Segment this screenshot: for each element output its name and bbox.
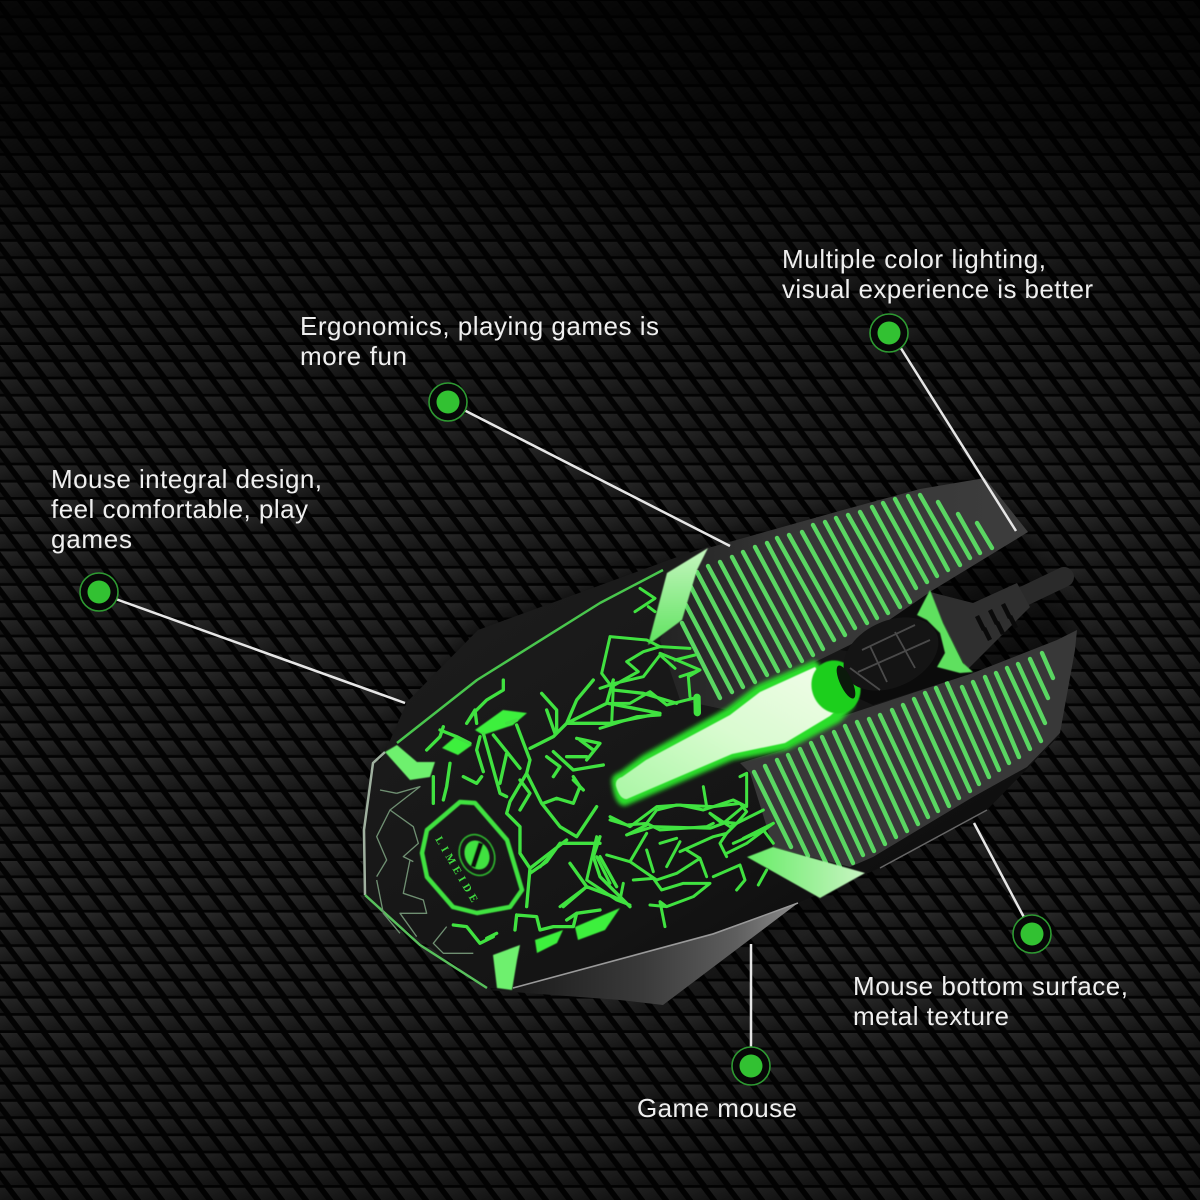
lower green trim <box>747 847 865 898</box>
shell edge highlights <box>364 570 987 988</box>
callout text: visual experience is better <box>782 274 1093 304</box>
scroll wheel housing glow <box>803 652 869 722</box>
callout text: Mouse integral design, <box>51 464 322 494</box>
scroll wheel <box>832 603 950 705</box>
left green trim <box>385 745 435 780</box>
game mouse illustration <box>362 478 1077 1005</box>
callout line <box>750 944 752 1054</box>
bright green diamonds <box>442 710 620 953</box>
callout line <box>897 342 1016 531</box>
top button <box>660 478 1028 710</box>
callout dot <box>429 383 467 421</box>
callout: multiple colour lighting <box>782 244 1093 531</box>
mouse body shell <box>362 546 1060 1005</box>
brand name on shield: LIMEIDE <box>432 834 480 905</box>
mouse drop shadow <box>363 478 1077 1005</box>
callout text: more fun <box>300 341 407 371</box>
green lightning cracks: upper centre <box>600 588 773 838</box>
callout dot <box>80 573 118 611</box>
top button light stripes <box>682 495 992 698</box>
callout: bottom surface <box>853 823 1128 1031</box>
cable and strain relief <box>930 577 1064 670</box>
shield emblem <box>422 802 522 913</box>
callout dot <box>1013 915 1051 953</box>
callout: game mouse <box>637 944 797 1123</box>
bottom button light stripes <box>754 653 1053 867</box>
callout text: games <box>51 524 132 554</box>
callout text: Mouse bottom surface, <box>853 971 1128 1001</box>
callout line <box>974 823 1027 923</box>
callout: mouse integral design <box>51 464 405 703</box>
green lightning cracks: lower centre <box>560 803 773 927</box>
green lightning cracks: left <box>427 680 677 943</box>
lower metal wedge <box>487 903 798 1005</box>
callout dot <box>870 314 908 352</box>
callout: ergonomics <box>300 311 730 546</box>
callout line <box>110 597 405 703</box>
callout text: metal texture <box>853 1001 1009 1031</box>
faint cracks on mouse nose <box>377 787 473 953</box>
callout text: Multiple color lighting, <box>782 244 1046 274</box>
callout line <box>458 407 730 546</box>
dark well behind scroll wheel <box>840 590 973 705</box>
bottom green trim <box>493 945 520 990</box>
callout text: Ergonomics, playing games is <box>300 311 659 341</box>
upper green trim <box>648 548 708 645</box>
callout text: Game mouse <box>637 1093 797 1123</box>
green collar behind scroll wheel <box>917 590 973 673</box>
centre light slot <box>612 660 855 806</box>
callout dot <box>732 1047 770 1085</box>
callout text: feel comfortable, play <box>51 494 308 524</box>
bottom button <box>740 630 1077 867</box>
